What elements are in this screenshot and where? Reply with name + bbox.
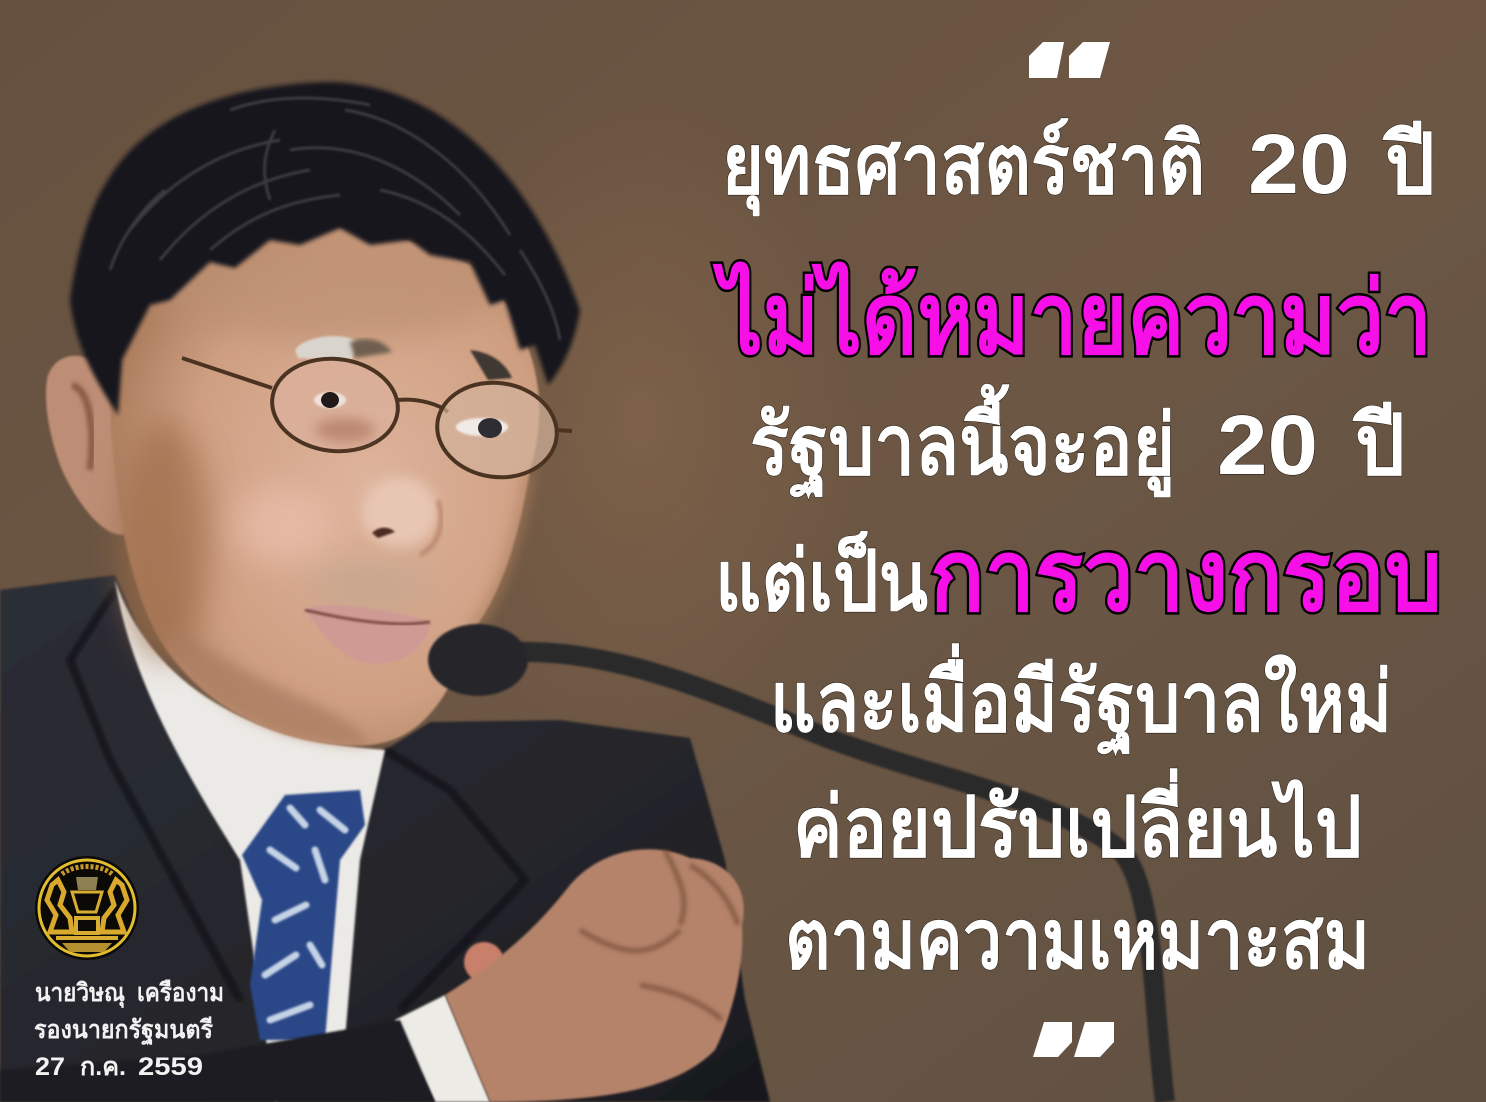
- cheek shading: [120, 420, 210, 660]
- eye bags: [315, 418, 375, 442]
- eyebrow right: [470, 350, 512, 380]
- jaw shadow: [170, 620, 370, 745]
- tie: [242, 790, 365, 1040]
- microphone stem: [520, 652, 1165, 1102]
- face: [109, 226, 539, 746]
- caption: name, position, date: [34, 979, 224, 1081]
- quote line 1: 20: [1248, 117, 1350, 211]
- nose wing: [420, 500, 441, 555]
- caption: name, position, date: ก.ค.: [80, 1053, 126, 1081]
- mouth: [305, 605, 432, 664]
- quote line 3: 20: [1217, 398, 1318, 492]
- hair: [70, 82, 580, 415]
- nostril: [372, 528, 395, 538]
- hair strands: [110, 98, 560, 340]
- lip line: [305, 610, 430, 624]
- caption: name, position, date: 27: [35, 1053, 65, 1081]
- cheek pink: [235, 485, 335, 565]
- quote line 5: และเมื่อมีรัฐบาลใหม่: [770, 643, 1392, 757]
- quote line 1: ยุทธศาสตร์ชาติ: [722, 117, 1205, 217]
- eyebrow highlight: [295, 336, 358, 360]
- caption: name, position, date: นายวิษณุ: [35, 979, 125, 1009]
- forehead shade: [160, 240, 500, 340]
- ear shading: [72, 385, 92, 470]
- bottom quotation mark: [1033, 1022, 1114, 1057]
- quote line 3: ปี: [1352, 398, 1405, 492]
- top quotation mark: [1029, 42, 1110, 78]
- quote line 3: รัฐบาลนี้จะอยู่: [750, 383, 1175, 500]
- lapel edges: [70, 590, 525, 1010]
- glasses: [182, 353, 572, 485]
- ear: [46, 356, 140, 535]
- caption: name, position, date: รองนายกรัฐมนตรี: [34, 1016, 214, 1046]
- quote line 4: แต่เป็น: [715, 530, 928, 628]
- microphone head: [428, 624, 528, 696]
- upper lip shade: [310, 561, 430, 609]
- suit jacket: [0, 575, 770, 1102]
- hand shading: [580, 850, 738, 1020]
- photo: man speaking at microphone: [0, 82, 1165, 1102]
- hand: [445, 849, 744, 1102]
- caption: name, position, date: เครืองาม: [137, 979, 224, 1007]
- lapel pin: [464, 942, 504, 982]
- nose: [362, 477, 438, 547]
- quote line 4 highlight: การวางกรอบ: [930, 520, 1442, 632]
- icon: government seal: [35, 856, 139, 960]
- sleeve: [0, 1020, 435, 1102]
- caption: name, position, date: 2559: [138, 1053, 203, 1081]
- tie pattern: [265, 808, 345, 1020]
- eye left: [314, 392, 346, 408]
- eyebrow left: [350, 339, 392, 358]
- quote line 3: [750, 383, 1405, 500]
- quote line 1: ปี: [1382, 117, 1435, 211]
- quote line 7: ตามความเหมาะสม: [785, 892, 1370, 986]
- shirt collar: [115, 580, 385, 1102]
- shirt cuff: [395, 995, 490, 1102]
- right cheek edge: [470, 470, 530, 635]
- quote line 6: ค่อยปรับเปลี่ยนไป: [793, 768, 1362, 874]
- eye right: [456, 418, 508, 436]
